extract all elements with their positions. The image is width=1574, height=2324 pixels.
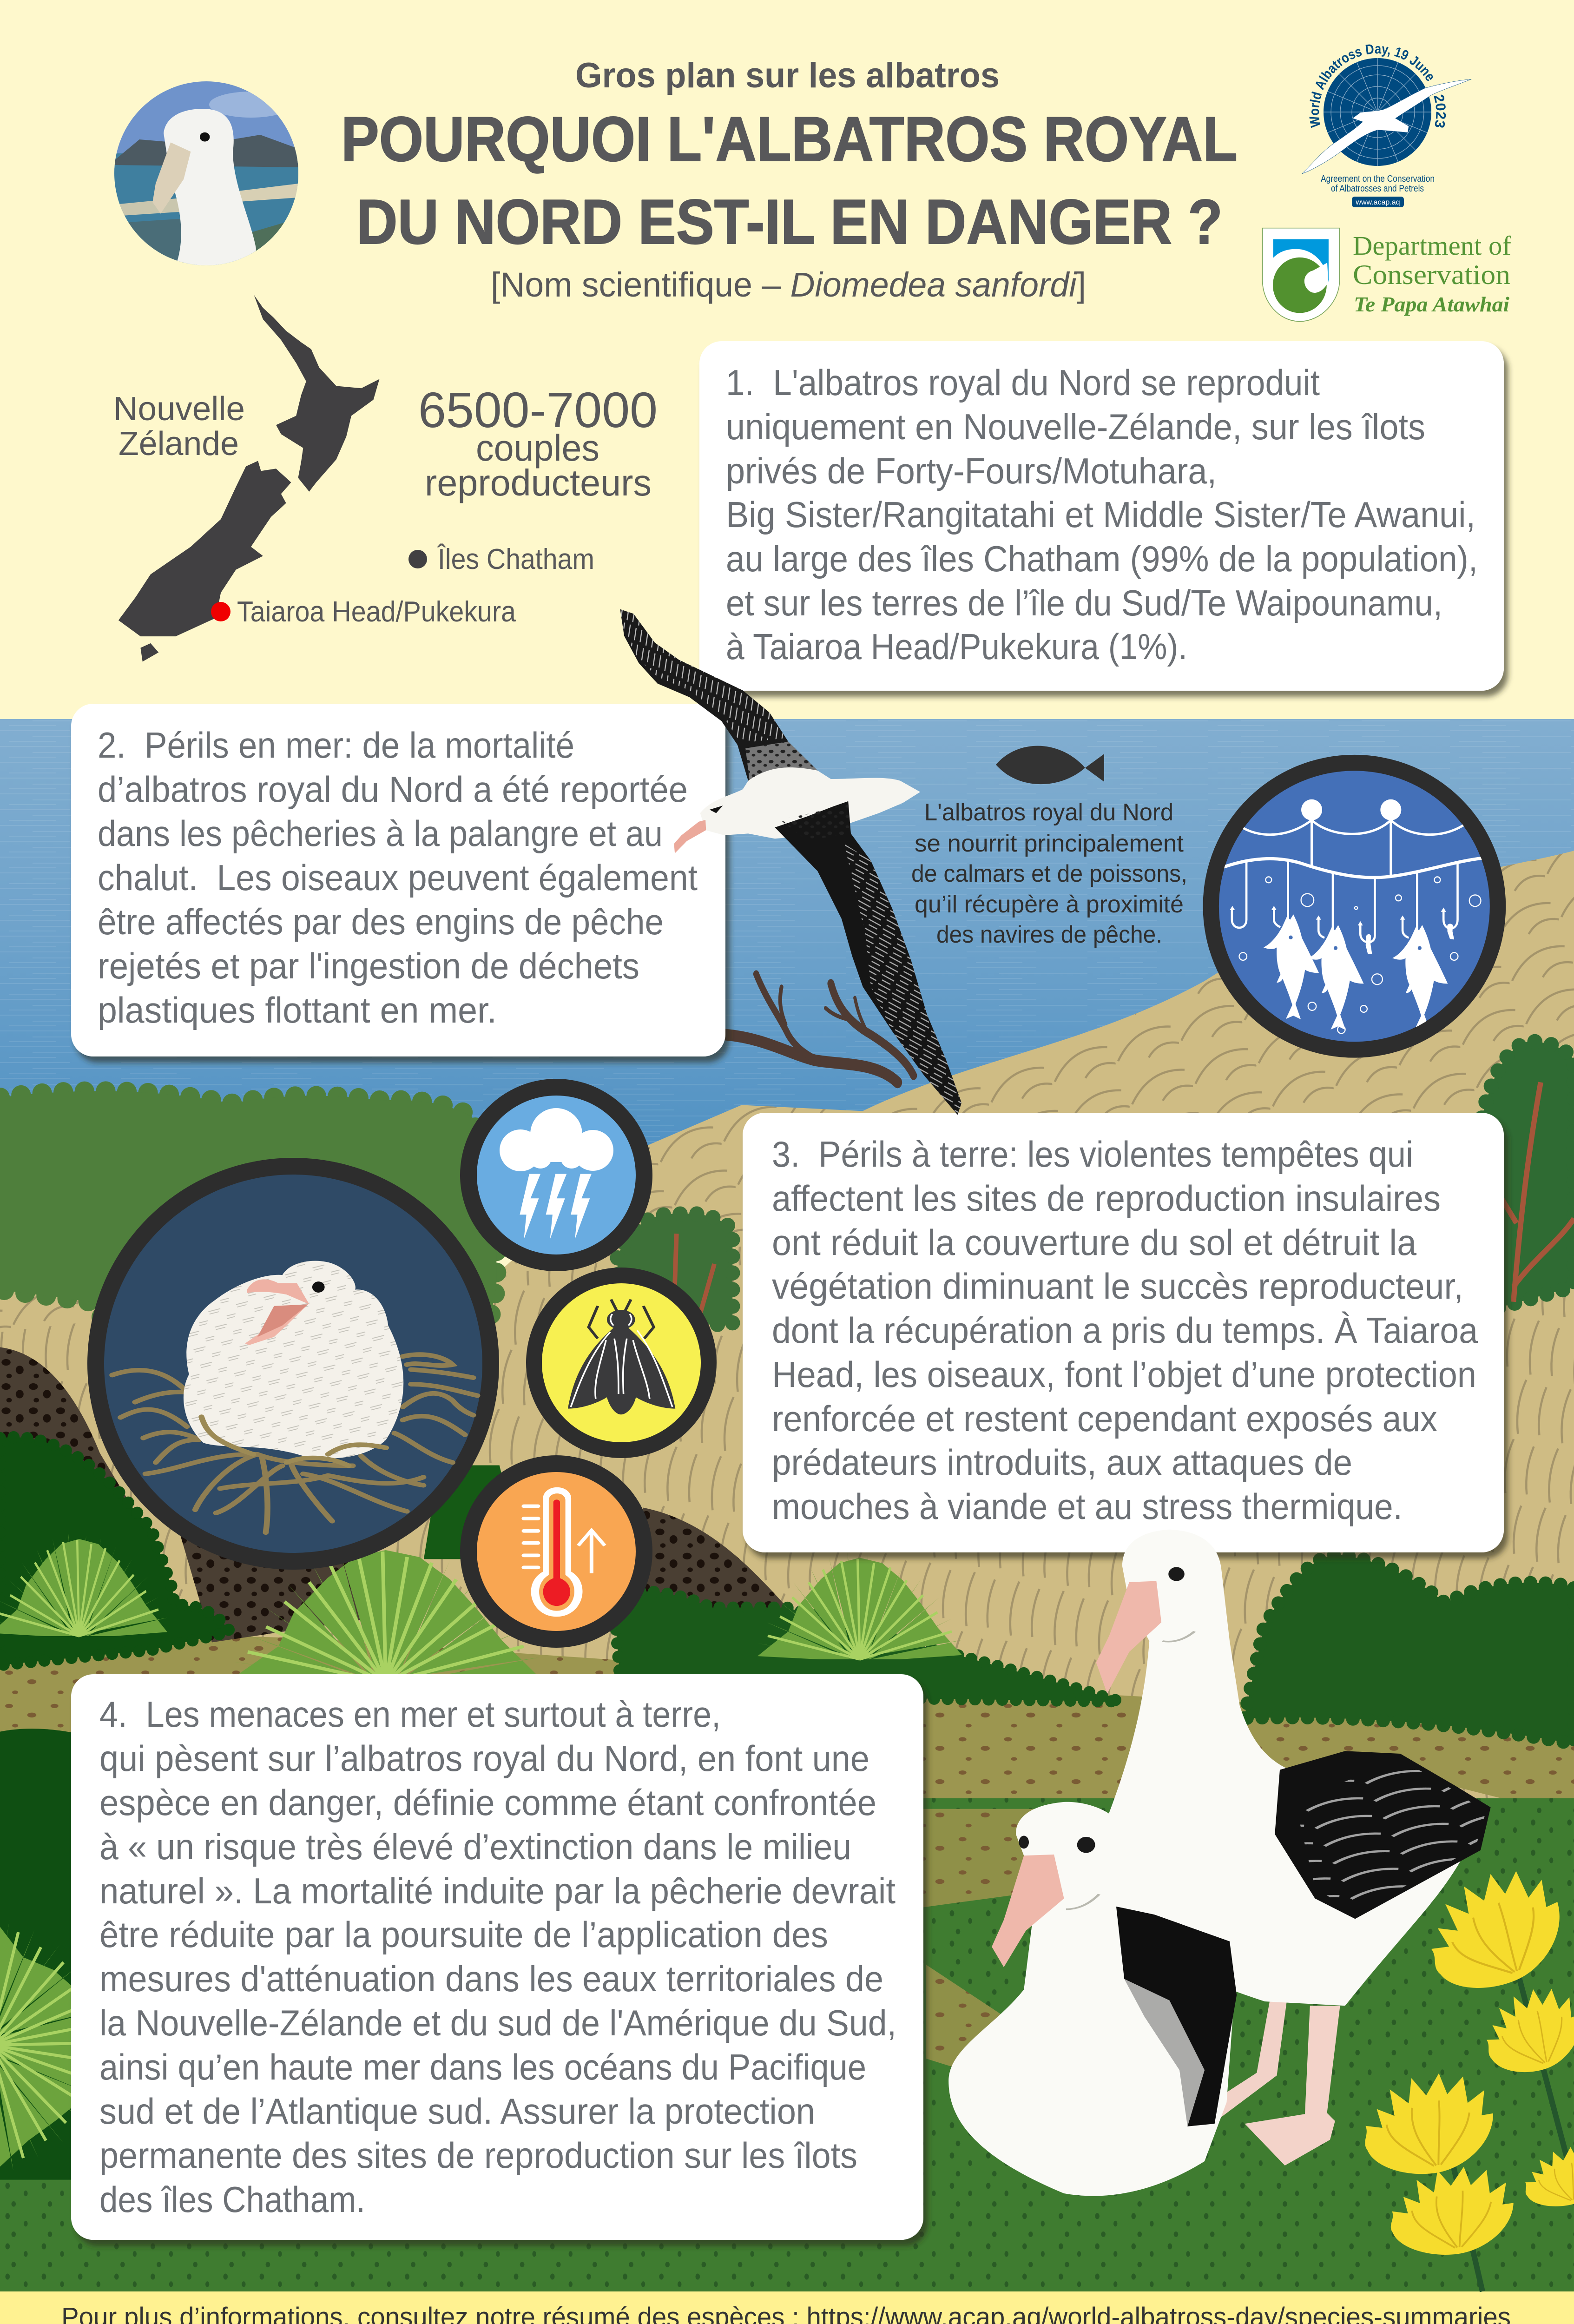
logo: World Albatross Day: World Albatross Day, 19 June — [1307, 41, 1438, 128]
panel 4: threats and conservation: ainsi qu’en haute mer dans les océans du Pacifique — [99, 2047, 866, 2087]
panel 3: perils on land: prédateurs introduits, aux attaques de — [772, 1442, 1352, 1483]
statistic: breeding pairs — [418, 382, 658, 503]
map of New Zealand — [119, 295, 379, 661]
map marker: Îles Chatham: Îles Chatham — [437, 543, 594, 575]
diet note text: qu’il récupère à proximité — [915, 891, 1184, 918]
statistic: breeding pairs: couples — [476, 427, 599, 469]
main title: DU NORD EST-IL EN DANGER ? — [356, 186, 1223, 257]
icon: fish — [996, 746, 1104, 784]
logo: World Albatross Day: www.acap.aq — [1355, 198, 1400, 206]
main title: POURQUOI L'ALBATROS ROYAL — [341, 104, 1238, 174]
diet note text: de calmars et de poissons, — [911, 860, 1187, 887]
flying albatross — [620, 609, 962, 1115]
panel 4: threats and conservation: être réduite par la poursuite de l’application des — [99, 1914, 828, 1955]
panel 1: breeding range: à Taiaroa Head/Pukekura (1%). — [726, 626, 1187, 667]
panel 3: perils on land: mouches à viande et au stress thermique. — [772, 1486, 1403, 1527]
small heading: Gros plan sur les albatros: Gros plan sur les albatros — [575, 56, 1000, 95]
panel 4: threats and conservation: à « un risque très élevé d’extinction dans le milieu — [99, 1826, 851, 1867]
round photo of albatross head — [114, 81, 298, 265]
panel 1: breeding range: et sur les terres de l’île du Sud/Te Waipounamu, — [726, 582, 1442, 623]
icon: rising temperature circle — [460, 1455, 652, 1648]
icon: longline fishing circle — [1203, 755, 1506, 1058]
bare branch — [725, 974, 914, 1083]
diet note text: L'albatros royal du Nord — [924, 799, 1173, 826]
statistic: breeding pairs: 6500-7000 — [418, 382, 658, 438]
panel 3: perils on land: Head, les oiseaux, font l’objet d’une protection — [772, 1354, 1476, 1395]
standing adult albatross — [1096, 1530, 1491, 2166]
icon: chick on nest circle — [87, 1158, 499, 1570]
panel 2: perils at sea: être affectés par des engins de pêche — [98, 901, 664, 942]
logo: World Albatross Day — [1302, 41, 1471, 207]
panel 2: perils at sea: d’albatros royal du Nord a été reportée — [98, 769, 688, 810]
panel 1: breeding range: 1. L'albatros royal du Nord se reproduit — [726, 362, 1320, 403]
grass tufts — [0, 1534, 167, 1636]
yellow flowers — [1355, 1854, 1574, 2291]
map label: Nouvelle Zélande: Nouvelle — [113, 390, 245, 428]
panel 3: perils on land: ont réduit la couverture du sol et détruit la — [772, 1222, 1417, 1263]
map label: Nouvelle Zélande — [113, 390, 245, 462]
logo: Department of Conservation: Te Papa Atawhai — [1354, 292, 1509, 316]
logo: Department of Conservation: Conservation — [1353, 259, 1510, 290]
panel 1: breeding range — [699, 341, 1504, 691]
logo: World Albatross Day: 2023 — [1430, 93, 1449, 129]
panel 4: threats and conservation: naturel ». La mortalité induite par la pêcherie devrait — [99, 1870, 896, 1911]
panel 4: threats and conservation: espèce en danger, définie comme étant confrontée — [99, 1782, 876, 1823]
diet note text: se nourrit principalement — [915, 830, 1184, 857]
panel 2: perils at sea: chalut. Les oiseaux peuvent également — [98, 857, 698, 898]
panel 1: breeding range: Big Sister/Rangitatahi et Middle Sister/Te Awanui, — [726, 494, 1475, 535]
panel 1: breeding range: uniquement en Nouvelle-Zélande, sur les îlots — [726, 406, 1425, 447]
panel 4: threats and conservation — [71, 1674, 923, 2240]
panel 2: perils at sea: rejetés et par l'ingestion de déchets — [98, 945, 639, 986]
map label: Nouvelle Zélande: Zélande — [119, 425, 239, 462]
icon: blowfly circle — [526, 1268, 717, 1458]
panel 4: threats and conservation: mesures d'atténuation dans les eaux territoriales de — [99, 1958, 883, 1999]
panel 4: threats and conservation: qui pèsent sur l’albatros royal du Nord, en font une — [99, 1738, 869, 1779]
panel 4: threats and conservation: des îles Chatham. — [99, 2179, 365, 2220]
main title — [341, 104, 1238, 257]
logo: World Albatross Day: Agreement on the Conservation — [1321, 174, 1435, 184]
panel 3: perils on land — [743, 1113, 1504, 1552]
panel 2: perils at sea: dans les pêcheries à la palangre et au — [98, 813, 663, 854]
panel 3: perils on land: renforcée et restent cependant exposés aux — [772, 1398, 1437, 1439]
footer band — [0, 2291, 1574, 2324]
scientific name: [Nom scientifique – Diomedea sanfordi] — [491, 265, 1086, 304]
map marker: Taiaroa Head: Taiaroa Head/Pukekura — [237, 596, 516, 628]
panel 3: perils on land: 3. Périls à terre: les violentes tempêtes qui — [772, 1134, 1413, 1175]
seated albatross — [948, 1802, 1237, 2196]
icon: storm cloud circle — [460, 1079, 652, 1271]
logo: Department of Conservation: Department of — [1353, 231, 1512, 261]
land layers — [0, 851, 1574, 2298]
statistic: breeding pairs: reproducteurs — [425, 462, 652, 503]
diet note text — [911, 799, 1187, 948]
sea — [0, 719, 1574, 1184]
panel 2: perils at sea — [71, 704, 725, 1056]
panel 4: threats and conservation: 4. Les menaces en mer et surtout à terre, — [99, 1694, 721, 1735]
logo: Department of Conservation — [1263, 228, 1512, 322]
panel 1: breeding range: au large des îles Chatham (99% de la population), — [726, 538, 1478, 579]
panel 3: perils on land: dont la récupération a pris du temps. À Taiaroa — [772, 1310, 1478, 1351]
panel 3: perils on land: végétation diminuant le succès reproducteur, — [772, 1266, 1463, 1307]
illustrated landscape background — [0, 719, 1574, 2298]
panel 4: threats and conservation: la Nouvelle-Zélande et du sud de l'Amérique du Sud, — [99, 2002, 896, 2043]
panel 1: breeding range: privés de Forty-Fours/Motuhara, — [726, 450, 1217, 491]
panel 4: threats and conservation: permanente des sites de reproduction sur les îlots — [99, 2135, 857, 2176]
logo: World Albatross Day: of Albatrosses and Petrels — [1331, 184, 1424, 194]
panel 4: threats and conservation: sud et de l’Atlantique sud. Assurer la protection — [99, 2091, 815, 2132]
panel 2: perils at sea: plastiques flottant en mer. — [98, 990, 497, 1030]
diet note text: des navires de pêche. — [936, 921, 1162, 948]
panel 2: perils at sea: 2. Périls en mer: de la mortalité — [98, 725, 574, 766]
panel 3: perils on land: affectent les sites de reproduction insulaires — [772, 1178, 1441, 1219]
